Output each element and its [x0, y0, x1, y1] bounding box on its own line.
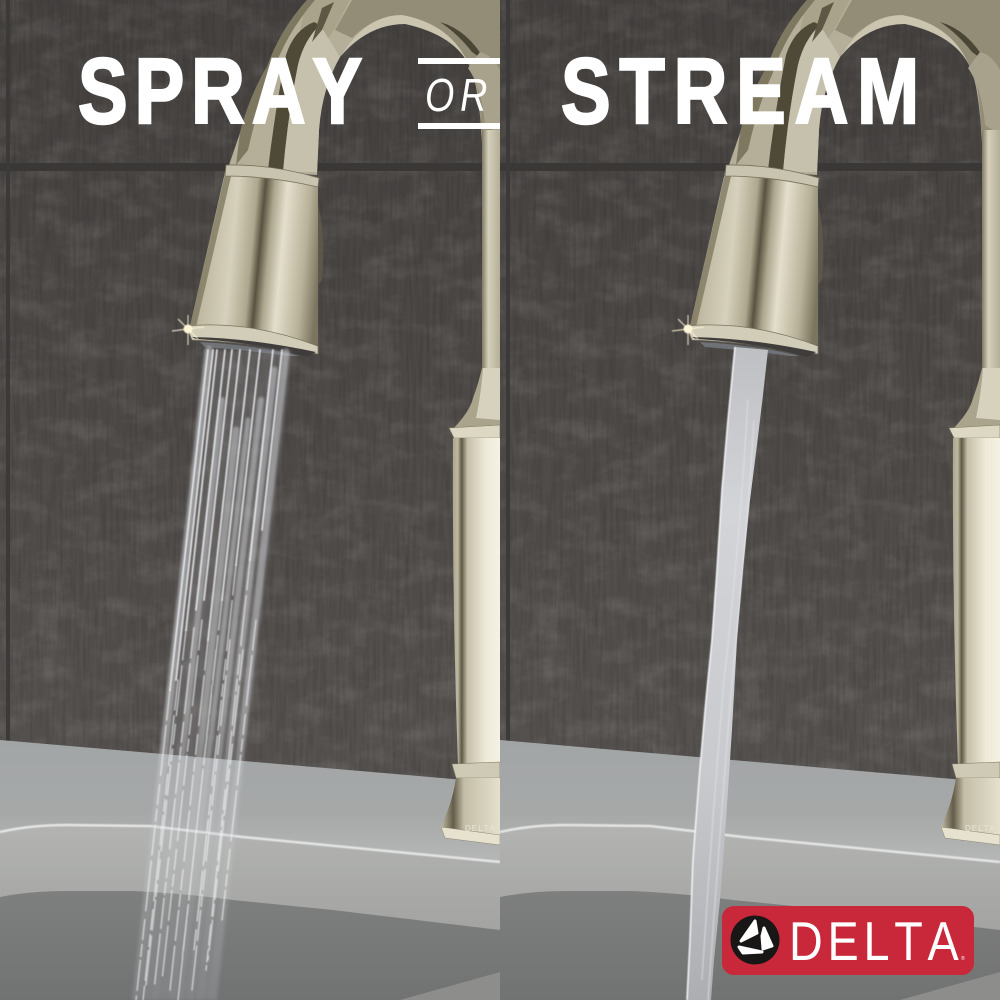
spray water	[132, 350, 292, 1000]
Delta wordmark: DELTA	[789, 910, 963, 972]
Delta logo badge	[722, 906, 974, 975]
or divider	[418, 58, 500, 129]
icon: Delta triangle mark	[730, 916, 780, 964]
stream water	[687, 347, 768, 1000]
panel: spray	[0, 0, 500, 1000]
panel: stream	[500, 0, 1000, 1000]
or label: OR	[425, 69, 493, 121]
registered mark: ®	[961, 955, 965, 962]
title: stream: STREAM	[561, 39, 928, 143]
title: spray: SPRAY	[78, 39, 369, 143]
